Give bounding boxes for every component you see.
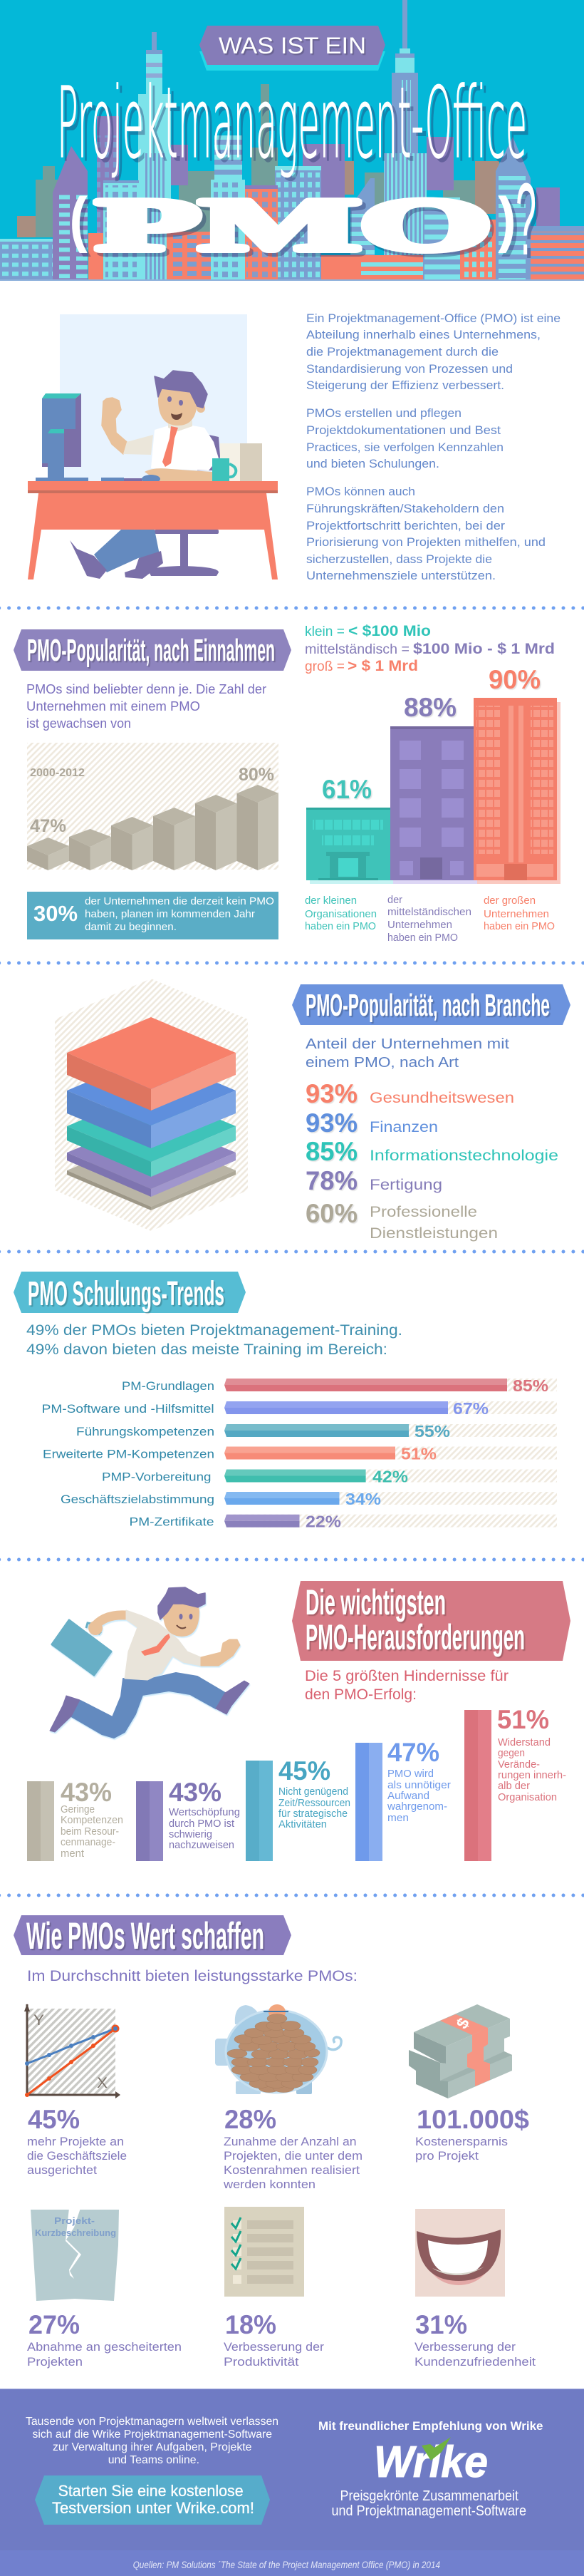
legend: revenue classes: groß = bbox=[305, 659, 345, 674]
challenge 2: 43%: durch PMO ist bbox=[169, 1818, 235, 1830]
stat: 101.000$ bbox=[415, 2105, 529, 2163]
challenge 1: 43%: 43% bbox=[61, 1778, 112, 1807]
challenge 3: 45% bbox=[246, 1756, 350, 1861]
title: ) bbox=[499, 186, 516, 254]
challenge 1: 43%: ment bbox=[61, 1848, 85, 1860]
stat: 18% bbox=[224, 2310, 324, 2369]
building: medium bbox=[390, 693, 474, 880]
challenge 4: 47%: als unnötiger bbox=[387, 1779, 451, 1791]
intro text: und bieten Schulungen. bbox=[306, 457, 439, 470]
stat: 31%: Verbesserung der bbox=[414, 2340, 516, 2354]
captions: building bars: der großen bbox=[484, 895, 536, 907]
stat: 28% bbox=[223, 2105, 363, 2191]
bar: Führungskompetenzen 55% bbox=[76, 1422, 557, 1441]
chart: building bars by company size bbox=[306, 665, 560, 884]
icon: xy line chart bbox=[24, 2004, 120, 2098]
legend: revenue classes: $100 Mio - $ 1 Mrd bbox=[413, 641, 555, 657]
stat list: by industry: Dienstleistungen bbox=[370, 1225, 498, 1242]
stat: 27%: Abnahme an gescheiterten bbox=[27, 2340, 182, 2354]
icon: torn project brief: Kurzbeschreibung bbox=[35, 2227, 116, 2238]
bar: Erweiterte PM-Kompetenzen 51% bbox=[43, 1444, 557, 1463]
footer text: sich auf die Wrike Projektmanagement-Software bbox=[33, 2428, 272, 2441]
challenge 5: 51%: 51% bbox=[497, 1705, 549, 1734]
stat: 101.000$: pro Projekt bbox=[415, 2149, 479, 2163]
bar: PM-Grundlagen 85% bbox=[122, 1376, 557, 1395]
callout: 30%: haben, planen im kommenden Jahr bbox=[85, 908, 255, 920]
ribbon: WAS IST EIN bbox=[199, 26, 385, 71]
callout: 30%: der Unternehmen die derzeit kein PMO bbox=[85, 895, 274, 907]
challenge 2: 43%: 43% bbox=[169, 1778, 221, 1807]
stat list: by industry: Fertigung bbox=[370, 1177, 442, 1193]
heading: Die wichtigsten PMO-Herausforderungen bbox=[292, 1581, 570, 1661]
stat list: by industry: 93% bbox=[306, 1108, 358, 1138]
intro text bbox=[306, 311, 560, 582]
sources bar: Quellen: PM Solutions ´The State of the Project Management Office (PMO) in 2014 bbox=[133, 2559, 440, 2570]
branch intro text: Anteil der Unternehmen mit bbox=[306, 1036, 510, 1052]
icon: checklist bbox=[224, 2207, 304, 2297]
building: large bbox=[474, 665, 557, 880]
stat: 45%: ausgerichtet bbox=[27, 2163, 97, 2177]
stat: 27%: Projekten bbox=[27, 2355, 83, 2369]
heading: Wie PMOs Wert schaffen bbox=[14, 1915, 291, 1957]
intro text: Führungskräften/Stakeholdern den bbox=[306, 502, 504, 515]
bar: PM-Zertifikate 22%: PM-Zertifikate bbox=[130, 1515, 214, 1529]
captions: building bars: haben ein PMO bbox=[305, 920, 376, 932]
stat list: by industry: Gesundheitswesen bbox=[370, 1090, 514, 1106]
chart: five challenges bbox=[27, 1705, 566, 1861]
challenge 2: 43%: nachzuweisen bbox=[169, 1839, 234, 1851]
hero panel: ? bbox=[516, 162, 536, 277]
icon: torn project brief: Projekt- bbox=[54, 2215, 95, 2226]
branch intro text: einem PMO, nach Art bbox=[306, 1055, 459, 1071]
challenge 5: 51%: Verände- bbox=[498, 1758, 540, 1771]
bar: Führungskompetenzen 55%: 55% bbox=[414, 1422, 450, 1441]
footer text: und Teams online. bbox=[108, 2454, 199, 2466]
challenge 1: 43% bbox=[27, 1778, 123, 1861]
training intro text: 49% der PMOs bieten Projektmanagement-Training. bbox=[26, 1322, 402, 1339]
legend: revenue classes: mittelständisch = bbox=[305, 642, 410, 657]
legend: revenue classes bbox=[305, 623, 555, 674]
intro text: PMOs erstellen und pflegen bbox=[306, 406, 462, 420]
bar: PM-Zertifikate 22% bbox=[130, 1513, 557, 1531]
captions: building bars bbox=[305, 894, 555, 944]
intro text: Practices, sie verfolgen Kennzahlen bbox=[306, 441, 504, 454]
icon: piggy bank with coins bbox=[215, 2004, 341, 2094]
challenges intro text: Die 5 größten Hindernisse für bbox=[305, 1668, 509, 1684]
challenge 3: 45%: Zeit/Ressourcen bbox=[278, 1797, 350, 1809]
stat: 31% bbox=[414, 2310, 536, 2369]
training intro text: 49% davon bieten das meiste Training im Bereich: bbox=[26, 1341, 387, 1358]
challenge 4: 47%: PMO wird bbox=[387, 1768, 434, 1780]
challenge 1: 43%: cenmanage- bbox=[61, 1836, 115, 1848]
captions: building bars: Organisationen bbox=[305, 908, 377, 920]
bar: PM-Grundlagen 85%: 85% bbox=[513, 1376, 548, 1395]
stat: 28%: werden konnten bbox=[223, 2178, 316, 2191]
legend: revenue classes: > $ 1 Mrd bbox=[348, 658, 418, 674]
footer text: zur Verwaltung ihrer Aufgaben, Projekte bbox=[53, 2441, 252, 2453]
footer panel bbox=[0, 2389, 584, 2550]
challenge 3: 45%: Aktivitäten bbox=[278, 1818, 327, 1830]
stat: 27%: 27% bbox=[28, 2310, 80, 2339]
illustration: running man with briefcase bbox=[50, 1587, 249, 1738]
illustration: stacked industry layers bbox=[55, 979, 248, 1231]
challenge 5: 51%: Widerstand bbox=[498, 1736, 551, 1748]
bar: Erweiterte PM-Kompetenzen 51%: Erweiterte PM-Kompetenzen bbox=[43, 1447, 214, 1461]
button: free trial: Starten Sie eine kostenlose bbox=[58, 2482, 244, 2500]
challenge 5: 51%: rungen innerh- bbox=[498, 1769, 566, 1781]
challenge 4: 47% bbox=[355, 1738, 451, 1861]
intro text: Priorisierung von Projekten mithelfen, und bbox=[306, 535, 546, 549]
bar: Geschäftszielabstimmung 34%: Geschäftszielabstimmung bbox=[61, 1493, 214, 1506]
captions: building bars: der bbox=[387, 894, 402, 906]
challenges intro text bbox=[305, 1668, 509, 1703]
challenges intro text: den PMO-Erfolg: bbox=[305, 1686, 417, 1703]
callout: 30% bbox=[27, 892, 278, 939]
logo: Wrike: Wrike bbox=[374, 2438, 488, 2487]
bar: PMP-Vorbereitung 42% bbox=[102, 1467, 557, 1485]
intro text: Ein Projektmanagement-Office (PMO) ist eine bbox=[306, 311, 560, 325]
training intro text bbox=[26, 1322, 402, 1358]
sources bar bbox=[0, 2550, 584, 2576]
stat: 18%: Produktivität bbox=[224, 2355, 299, 2369]
icon: torn project brief bbox=[31, 2208, 119, 2301]
branch intro text bbox=[306, 1036, 510, 1071]
challenge 1: 43%: beim Resour- bbox=[61, 1825, 119, 1838]
challenge 5: 51%: Organisation bbox=[498, 1791, 557, 1803]
building: medium: 88% bbox=[404, 693, 457, 722]
callout: 30%: damit zu beginnen. bbox=[85, 921, 177, 933]
heading: PMO-Popularität, nach Einnahmen: PMO-Popularität, nach Einnahmen bbox=[27, 633, 275, 668]
icon: stack of cash: $ bbox=[452, 2014, 473, 2032]
tagline: und Projektmanagement-Software bbox=[332, 2503, 526, 2519]
chart: isometric growth bars 47% to 80% bbox=[27, 743, 278, 870]
stat: 101.000$: 101.000$ bbox=[417, 2105, 529, 2134]
building: small: 61% bbox=[322, 775, 372, 804]
legend: revenue classes: klein = bbox=[305, 624, 345, 639]
revenue intro text: ist gewachsen von bbox=[26, 716, 131, 731]
icon: smiling mouth bbox=[415, 2209, 505, 2297]
legend: revenue classes: < $100 Mio bbox=[348, 623, 431, 639]
captions: building bars: Unternehmen bbox=[387, 919, 452, 931]
recommendation heading: Mit freundlicher Empfehlung von Wrike bbox=[318, 2419, 543, 2433]
bar: PM-Zertifikate 22%: 22% bbox=[306, 1513, 341, 1531]
stat list: by industry bbox=[306, 1079, 558, 1242]
hero panel bbox=[0, 0, 584, 281]
stat list: by industry: 60% bbox=[306, 1199, 358, 1228]
stat: 45%: die Geschäftsziele bbox=[27, 2149, 127, 2163]
bar: PM-Software 67% bbox=[42, 1399, 557, 1418]
stat: 18%: 18% bbox=[225, 2310, 276, 2339]
captions: building bars: mittelständischen bbox=[387, 906, 471, 918]
stat: 31%: 31% bbox=[415, 2310, 467, 2339]
intro text: die Projektmanagement durch die bbox=[306, 345, 499, 359]
icon: xy line chart: Y bbox=[33, 2012, 44, 2029]
revenue intro text: Unternehmen mit einem PMO bbox=[26, 699, 200, 713]
challenge 3: 45%: Nicht genügend bbox=[278, 1786, 348, 1798]
challenge 4: 47%: wahrgenom- bbox=[387, 1800, 447, 1813]
captions: building bars: der kleinen bbox=[305, 895, 357, 907]
captions: building bars: Unternehmen bbox=[484, 908, 549, 920]
heading: PMO Schulungs-Trends bbox=[14, 1272, 246, 1313]
challenge 4: 47%: 47% bbox=[387, 1738, 439, 1767]
chart: isometric growth bars 47% to 80%: 2000-2012 bbox=[30, 767, 85, 779]
challenge 3: 45%: 45% bbox=[278, 1756, 330, 1786]
intro text: Abteilung innerhalb eines Unternehmens, bbox=[306, 328, 541, 341]
value intro text: Im Durchschnitt bieten leistungsstarke PMOs: bbox=[27, 1968, 358, 1984]
icon: stack of cash bbox=[409, 2004, 512, 2098]
bar: Geschäftszielabstimmung 34%: 34% bbox=[345, 1490, 381, 1508]
challenge 2: 43% bbox=[136, 1778, 240, 1861]
challenge 1: 43%: Kompetenzen bbox=[61, 1814, 123, 1826]
bar: PM-Software 67%: PM-Software und -Hilfsmittel bbox=[42, 1402, 214, 1416]
icon: xy line chart: X bbox=[97, 2075, 108, 2091]
heading: Die wichtigsten PMO-Herausforderungen: Die wichtigsten bbox=[306, 1582, 446, 1622]
stat: 28%: Kostenrahmen realisiert bbox=[224, 2163, 360, 2177]
challenge 5: 51%: gegen bbox=[498, 1747, 525, 1759]
captions: building bars: haben ein PMO bbox=[387, 932, 458, 944]
title bbox=[57, 67, 536, 277]
building: large: 90% bbox=[489, 665, 541, 694]
captions: building bars: haben ein PMO bbox=[484, 920, 555, 932]
stat list: by industry: Finanzen bbox=[370, 1119, 438, 1135]
bar: PMP-Vorbereitung 42%: PMP-Vorbereitung bbox=[102, 1470, 211, 1484]
revenue intro text bbox=[26, 682, 266, 731]
stat: 18%: Verbesserung der bbox=[224, 2340, 324, 2354]
bar: PM-Grundlagen 85%: PM-Grundlagen bbox=[122, 1379, 214, 1393]
stat: 31%: Kundenzufriedenheit bbox=[414, 2355, 536, 2369]
challenge 5: 51%: alb der bbox=[498, 1780, 530, 1792]
illustration: man at desk bbox=[28, 314, 278, 579]
intro text: Projektfortschritt berichten, bei der bbox=[306, 519, 505, 532]
heading: Wie PMOs Wert schaffen: Wie PMOs Wert schaffen bbox=[26, 1915, 264, 1957]
ribbon: WAS IST EIN: WAS IST EIN bbox=[219, 33, 366, 58]
stat list: by industry: Professionelle bbox=[370, 1204, 477, 1220]
bar: PMP-Vorbereitung 42%: 42% bbox=[372, 1467, 408, 1485]
revenue intro text: PMOs sind beliebter denn je. Die Zahl der bbox=[26, 682, 266, 696]
bar: Erweiterte PM-Kompetenzen 51%: 51% bbox=[401, 1444, 437, 1463]
intro text: sicherzustellen, dass Projekte die bbox=[306, 552, 492, 566]
stat list: by industry: 85% bbox=[306, 1137, 358, 1166]
challenge 5: 51% bbox=[464, 1705, 566, 1861]
chart: isometric growth bars 47% to 80%: 47% bbox=[30, 816, 66, 836]
title: ( bbox=[70, 186, 88, 254]
bar chart: training trends bbox=[42, 1376, 557, 1531]
callout: 30%: 30% bbox=[33, 901, 78, 926]
challenge 4: 47%: men bbox=[387, 1812, 409, 1824]
heading: PMO-Popularität, nach Einnahmen bbox=[14, 629, 291, 671]
button: free trial bbox=[35, 2475, 270, 2525]
bar: Geschäftszielabstimmung 34% bbox=[61, 1490, 557, 1508]
bar: Führungskompetenzen 55%: Führungskompetenzen bbox=[76, 1425, 214, 1438]
stat: 28%: 28% bbox=[224, 2105, 276, 2134]
challenge 3: 45%: für strategische bbox=[278, 1808, 348, 1820]
building: small bbox=[306, 775, 390, 880]
heading: PMO Schulungs-Trends: PMO Schulungs-Trends bbox=[28, 1275, 224, 1313]
title: PMO bbox=[97, 182, 491, 267]
stat: 45% bbox=[27, 2105, 127, 2177]
intro text: Projektdokumentationen und Best bbox=[306, 423, 501, 437]
tagline: Preisgekrönte Zusammenarbeit bbox=[340, 2488, 518, 2504]
intro text: Unternehmensziele unterstützen. bbox=[306, 569, 496, 582]
challenge 2: 43%: Wertschöpfung bbox=[169, 1806, 240, 1818]
intro text: Standardisierung von Prozessen und bbox=[306, 362, 513, 376]
footer text bbox=[26, 2416, 278, 2466]
skyline bbox=[0, 0, 584, 281]
bar: PM-Software 67%: 67% bbox=[453, 1399, 489, 1418]
stat list: by industry: 93% bbox=[306, 1079, 358, 1108]
challenge 1: 43%: Geringe bbox=[61, 1803, 95, 1815]
intro text: Steigerung der Effizienz verbessert. bbox=[306, 378, 504, 392]
intro text: PMOs können auch bbox=[306, 485, 415, 498]
stat: 28%: Zunahme der Anzahl an bbox=[224, 2135, 356, 2148]
stat: 45%: mehr Projekte an bbox=[27, 2135, 124, 2148]
challenge 2: 43%: schwierig bbox=[169, 1828, 212, 1840]
stat list: by industry: 78% bbox=[306, 1166, 358, 1195]
button: free trial: Testversion unter Wrike.com! bbox=[52, 2499, 254, 2517]
stat list: by industry: Informationstechnologie bbox=[370, 1148, 558, 1164]
stat: 45%: 45% bbox=[28, 2105, 80, 2134]
stat: 101.000$: Kostenersparnis bbox=[415, 2135, 508, 2148]
challenge 4: 47%: Aufwand bbox=[387, 1790, 429, 1802]
tagline bbox=[332, 2488, 526, 2519]
footer text: Tausende von Projektmanagern weltweit verlassen bbox=[26, 2416, 278, 2428]
chart: isometric growth bars 47% to 80%: 80% bbox=[239, 765, 274, 785]
stat: 27% bbox=[27, 2310, 182, 2369]
stat: 28%: Projekten, die unter dem bbox=[224, 2149, 363, 2163]
